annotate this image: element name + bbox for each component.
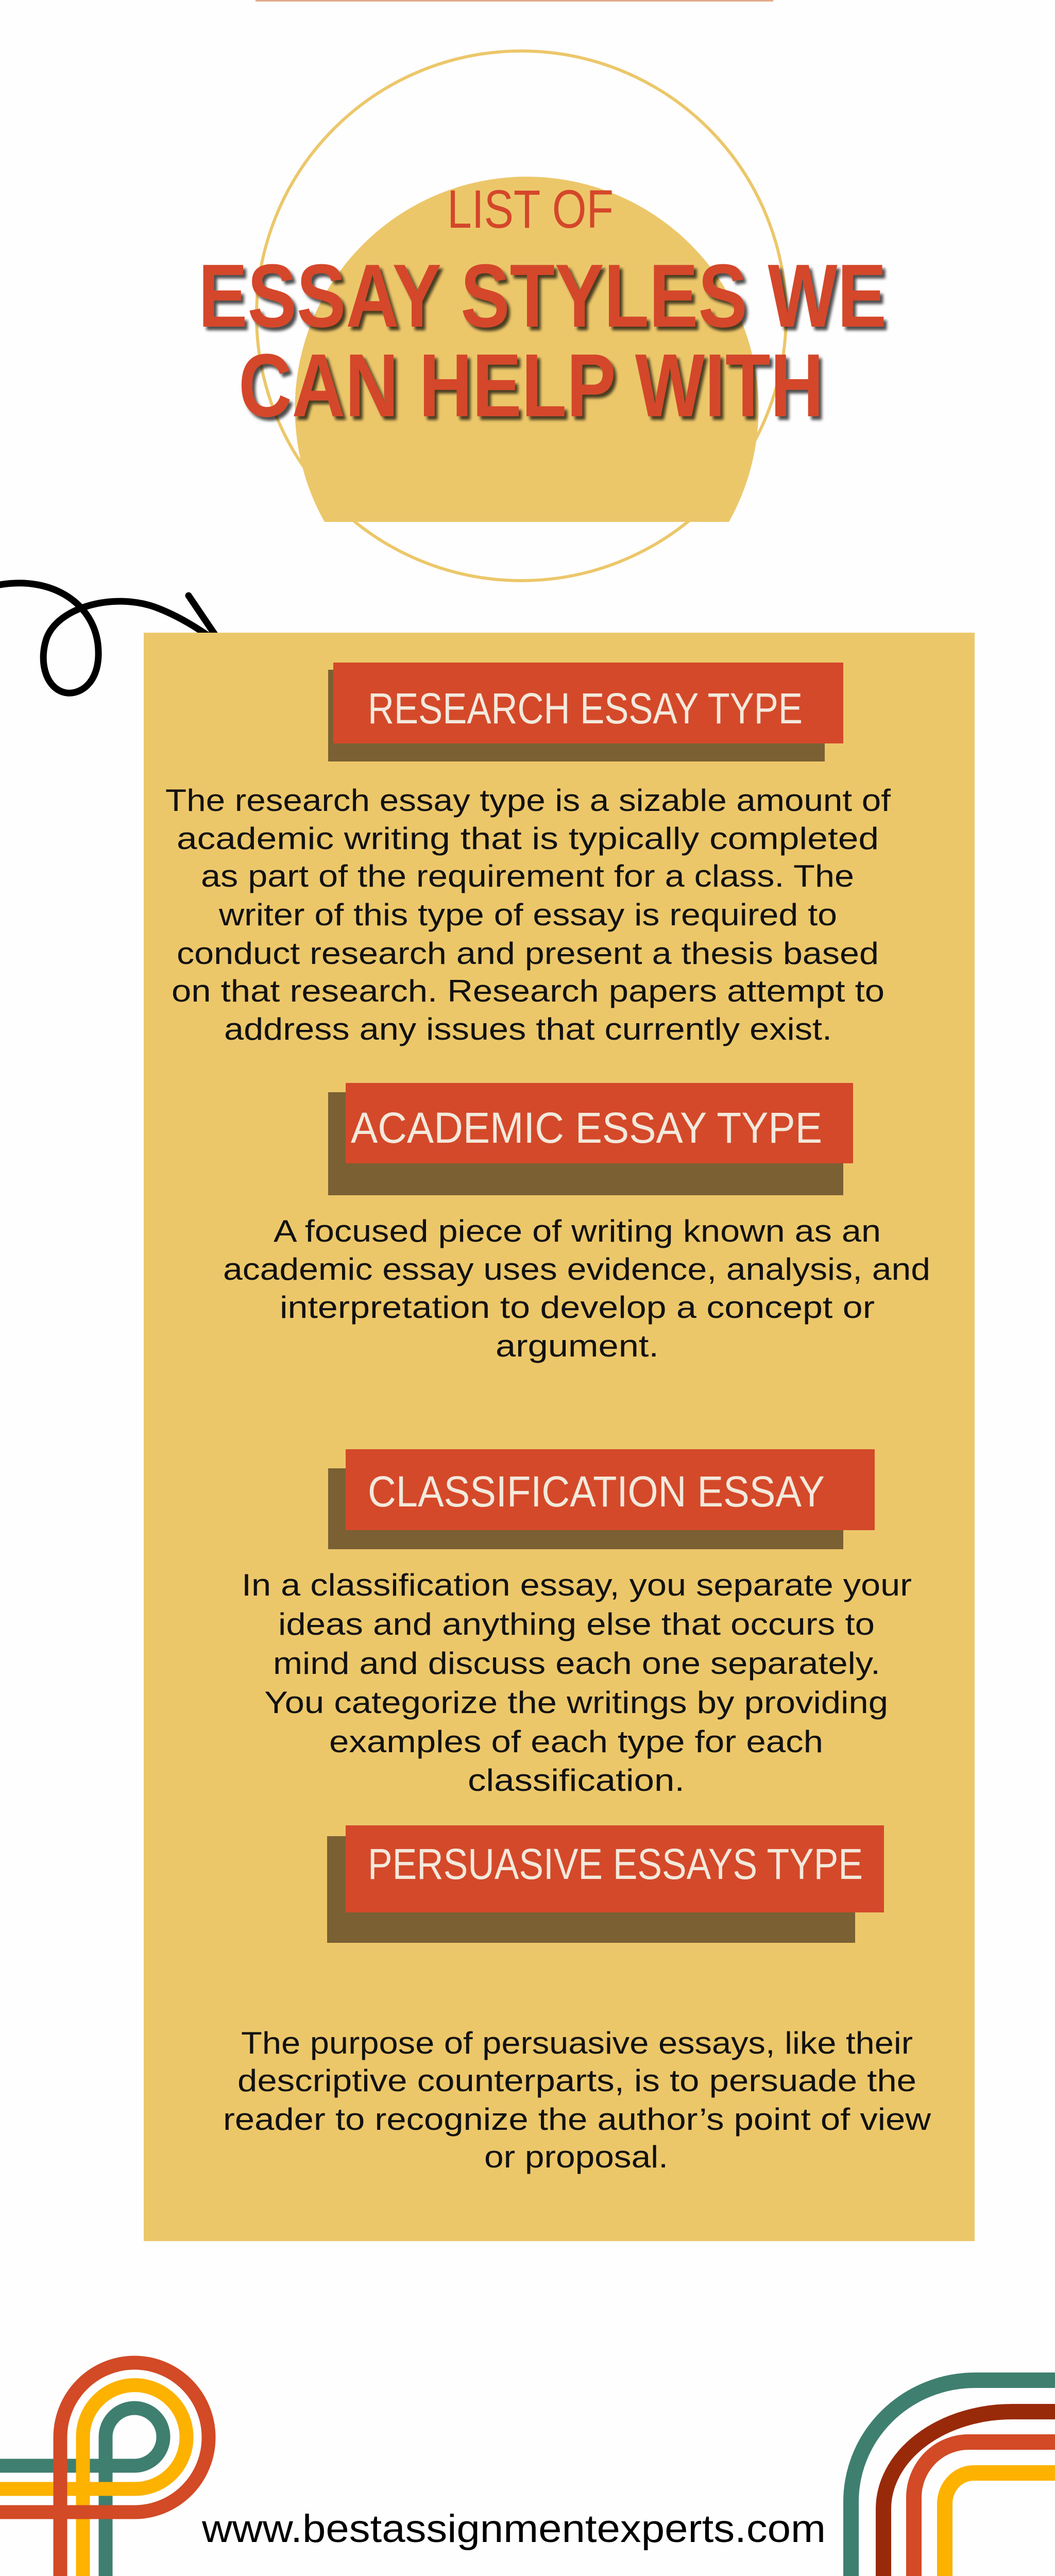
outer ring [257, 51, 786, 581]
heading: academic essay type: ACADEMIC ESSAY TYPE [351, 1104, 822, 1152]
text: research paragraph: as part of the requirement for a class. The [201, 859, 854, 893]
heading: persuasive essays type: PERSUASIVE ESSAYS TYPE [368, 1840, 863, 1888]
text: classification paragraph: mind and discuss each one separately. [273, 1646, 880, 1681]
text: persuasive paragraph [223, 2026, 931, 2174]
footer url: www.bestassignmentexperts.com [201, 2507, 826, 2551]
title: list of: LIST OF [447, 179, 614, 240]
icon: curly arrow [0, 583, 222, 693]
heading: research essay type: RESEARCH ESSAY TYPE [368, 684, 803, 733]
text: academic paragraph: interpretation to develop a concept or [280, 1290, 875, 1325]
heading: research essay type [328, 663, 843, 761]
text: research paragraph: academic writing that is typically completed [177, 821, 879, 856]
title: main: CAN HELP WITH [239, 335, 824, 435]
text: research paragraph: The research essay type is a sizable amount of [165, 783, 891, 818]
text: persuasive paragraph: or proposal. [484, 2140, 668, 2174]
text: academic paragraph: academic essay uses evidence, analysis, and [223, 1252, 930, 1286]
inner filled circle [295, 177, 758, 522]
text: academic paragraph: A focused piece of writing known as an [274, 1214, 881, 1248]
text: classification paragraph: examples of each type for each [329, 1724, 823, 1759]
text: classification paragraph [242, 1568, 912, 1798]
text: classification paragraph: classification. [468, 1763, 685, 1798]
text: persuasive paragraph: The purpose of persuasive essays, like their [241, 2026, 913, 2060]
text: research paragraph: writer of this type of essay is required to [218, 897, 837, 932]
text: classification paragraph: You categorize the writings by providing [264, 1685, 888, 1720]
heading: classification essay [328, 1449, 875, 1549]
text: classification paragraph: ideas and anything else that occurs to [278, 1607, 875, 1641]
text: research paragraph: on that research. Research papers attempt to [172, 974, 884, 1008]
text: persuasive paragraph: descriptive counterparts, is to persuade the [237, 2063, 916, 2098]
title: main [198, 245, 887, 435]
heading: classification essay: CLASSIFICATION ESSAY [368, 1467, 825, 1516]
text: classification paragraph: In a classification essay, you separate your [242, 1568, 912, 1602]
text: research paragraph [165, 783, 891, 1046]
heading: persuasive essays type [327, 1825, 884, 1943]
text: persuasive paragraph: reader to recognize the author’s point of view [223, 2102, 931, 2137]
decoration: right arcs [851, 2380, 1055, 2576]
title block with circles [198, 51, 887, 581]
text: academic paragraph: argument. [496, 1329, 659, 1363]
text: academic paragraph [223, 1214, 930, 1363]
panel: essay types [144, 633, 975, 2241]
text: research paragraph: address any issues that currently exist. [224, 1012, 832, 1046]
heading: academic essay type [328, 1083, 853, 1195]
text: research paragraph: conduct research and present a thesis based [177, 936, 879, 971]
decoration: left loops [0, 2363, 209, 2576]
title: main: ESSAY STYLES WE [198, 245, 887, 346]
